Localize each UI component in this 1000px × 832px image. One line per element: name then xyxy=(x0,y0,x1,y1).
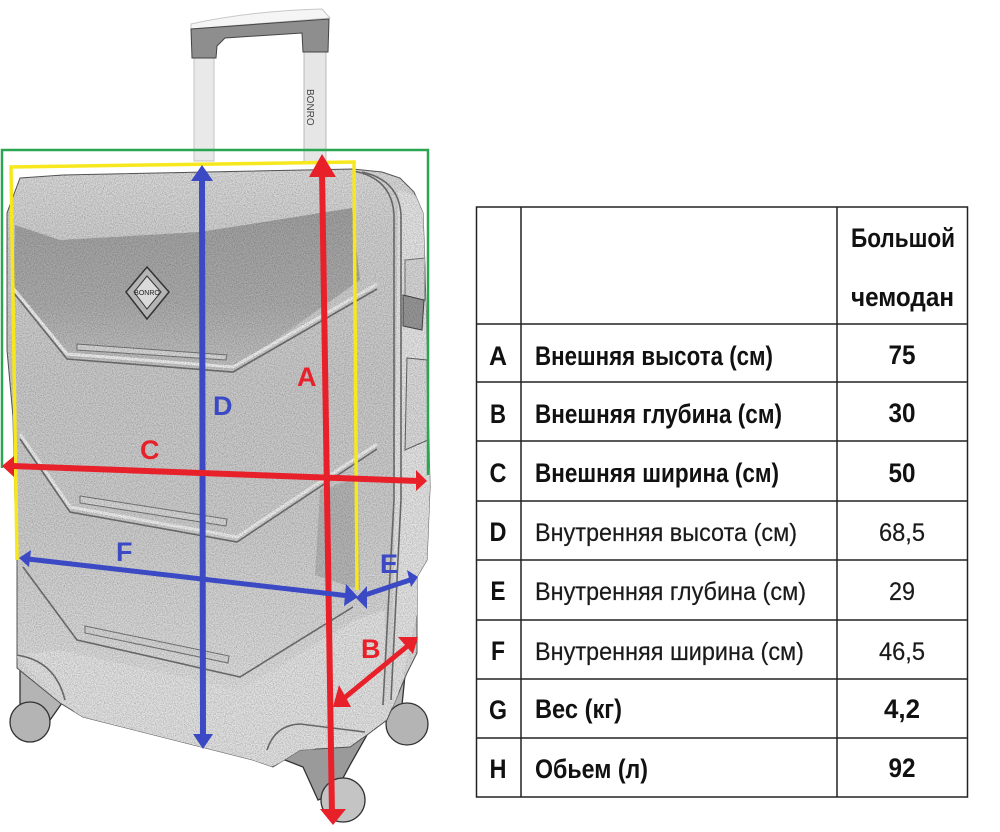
table grid xyxy=(476,207,968,797)
row C: Внешняя ширина (см) xyxy=(535,458,779,488)
suitcase shell xyxy=(7,169,430,767)
row B xyxy=(490,398,916,429)
table of dimensions xyxy=(476,207,968,797)
row A: A xyxy=(489,341,507,371)
row B: B xyxy=(490,399,506,429)
row G: Вес (кг) xyxy=(535,694,622,724)
row F xyxy=(491,636,925,666)
row H: 92 xyxy=(888,753,916,783)
dimension letter A: A xyxy=(297,362,316,392)
row G: G xyxy=(489,695,507,725)
row E: E xyxy=(490,576,506,606)
logo badge: BONRO xyxy=(134,290,160,297)
row F: F xyxy=(491,636,505,666)
dimension letter F: F xyxy=(116,537,132,567)
arrow F xyxy=(19,550,358,606)
row C: 50 xyxy=(888,458,916,488)
row A: 75 xyxy=(888,340,916,370)
dimension letter C: C xyxy=(140,435,160,465)
row A xyxy=(489,340,916,371)
arrow C xyxy=(2,456,427,491)
row B: Внешняя глубина (см) xyxy=(535,399,782,429)
row C: C xyxy=(490,458,506,488)
wheels xyxy=(10,668,428,822)
column header: чемодан xyxy=(851,282,954,312)
row A: Внешняя высота (см) xyxy=(535,341,773,371)
outer dimensions frame: green xyxy=(2,150,428,475)
row H xyxy=(490,753,916,784)
row E xyxy=(490,576,915,606)
row D: 68,5 xyxy=(879,519,925,547)
suitcase illustration xyxy=(6,8,430,823)
logo badge xyxy=(126,267,169,319)
row G: 4,2 xyxy=(884,694,920,724)
row H: H xyxy=(490,754,506,784)
row G xyxy=(489,694,920,725)
arrow E xyxy=(356,570,418,609)
row D xyxy=(490,517,925,547)
column header: Большой xyxy=(851,223,955,253)
dimension letter E: E xyxy=(380,549,398,579)
arrow A xyxy=(309,154,346,825)
row F: Внутренняя ширина (см) xyxy=(535,638,804,666)
dimension letter D: D xyxy=(213,391,232,421)
row F: 46,5 xyxy=(879,638,925,666)
telescopic handle xyxy=(191,9,330,162)
row E: 29 xyxy=(889,578,915,606)
row E: Внутренняя глубина (см) xyxy=(535,578,806,606)
brand on handle: BONRO xyxy=(304,89,315,126)
row D: Внутренняя высота (см) xyxy=(535,519,797,547)
shell shading and ribs xyxy=(7,169,430,766)
row H: Обьем (л) xyxy=(535,754,648,784)
inner dimensions frame: yellow xyxy=(11,162,357,590)
dimension letter B: B xyxy=(361,634,380,664)
row C xyxy=(490,458,916,488)
arrow B xyxy=(333,637,418,707)
arrow D xyxy=(191,165,213,749)
row D: D xyxy=(490,517,506,547)
row B: 30 xyxy=(888,398,916,428)
column header xyxy=(851,223,955,312)
